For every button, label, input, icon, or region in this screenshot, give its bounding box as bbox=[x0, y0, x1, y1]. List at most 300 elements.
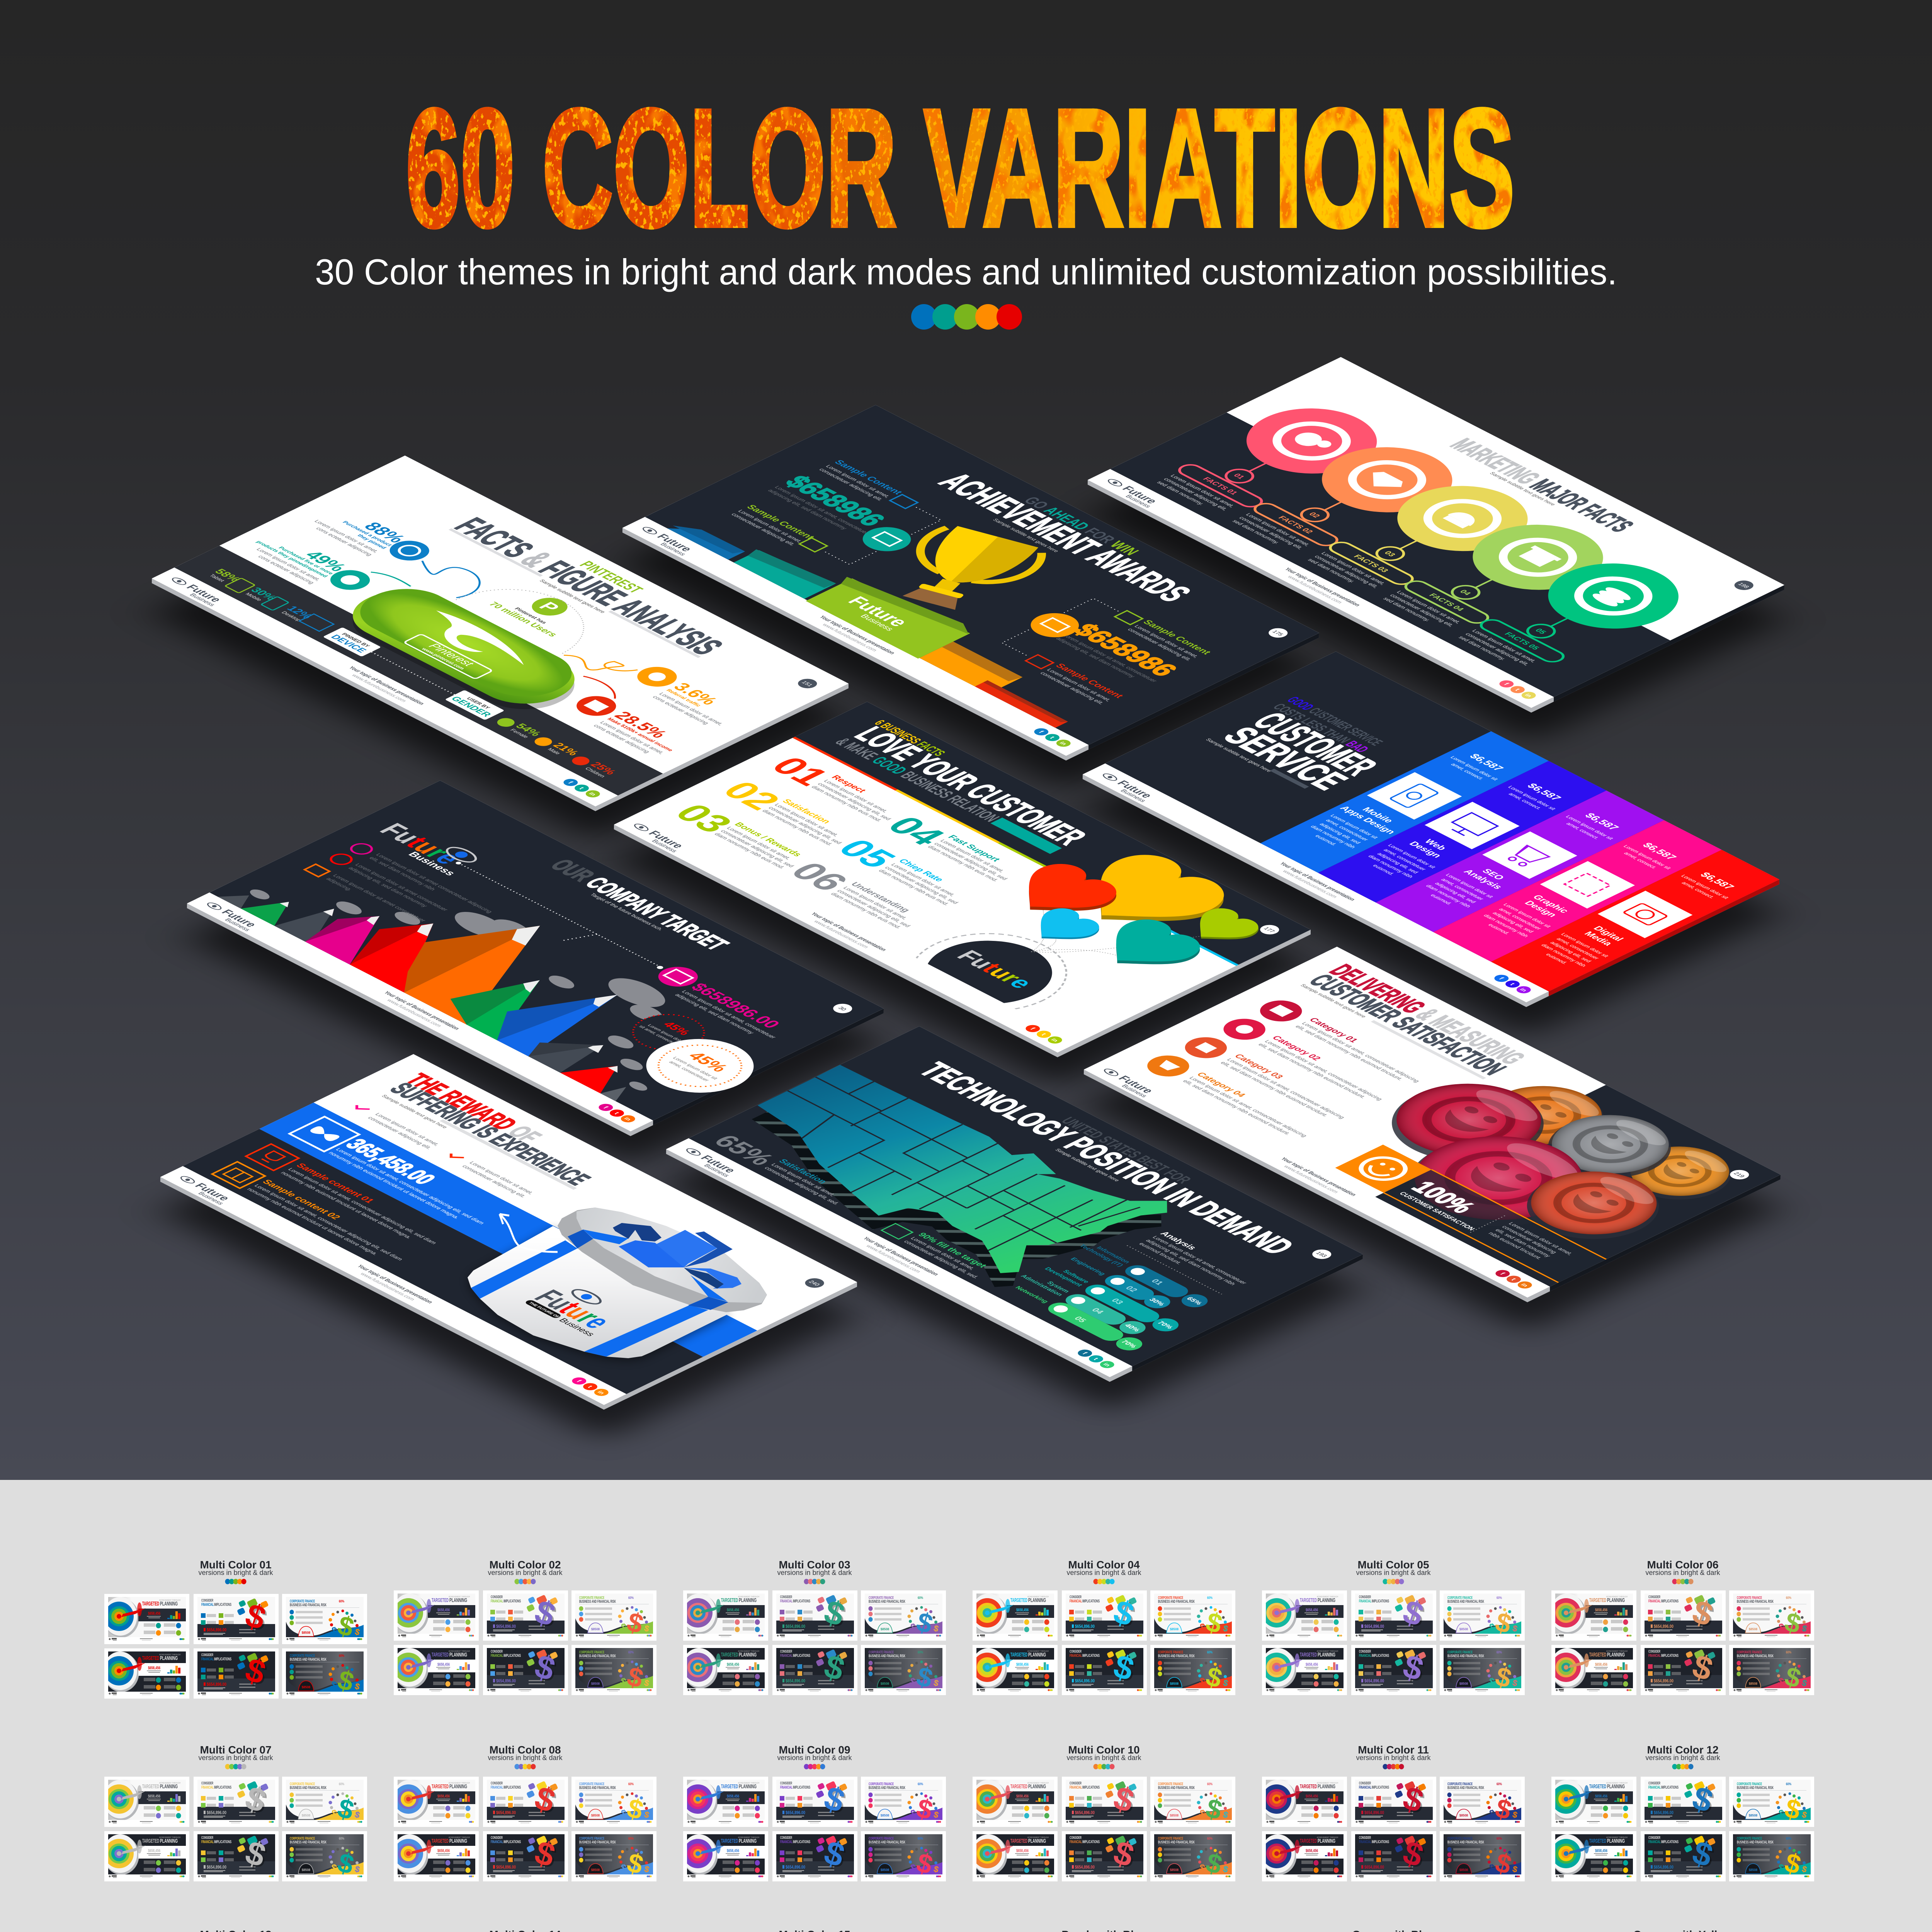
heading bbox=[1204, 695, 1408, 796]
heading: Sample subtitle text goes here bbox=[380, 1094, 449, 1129]
stats left: cons ectetuer adipiscing bbox=[314, 527, 373, 557]
service labels: Design bbox=[1522, 900, 1559, 918]
service icons bbox=[1367, 772, 1692, 938]
satisfaction text bbox=[1470, 1216, 1576, 1269]
page number bbox=[1731, 578, 1757, 592]
theme: Multi Color 03: versions in bright & dark bbox=[777, 1569, 852, 1577]
blue band content: nonummy nibh euismod tincidunt ut laoreet dolore magna. bbox=[327, 1151, 461, 1220]
theme: Multi Color 09: Multi Color 09 bbox=[779, 1744, 850, 1756]
checklist: Lorem ipsum dolor sit amet, bbox=[374, 1112, 440, 1147]
categories: elit, sed diam nonummy nibh euismod tincidunt. bbox=[1257, 1043, 1367, 1099]
footer bbox=[163, 575, 604, 801]
overline: PINTEREST bbox=[576, 559, 647, 595]
fact pills: 05 bbox=[1533, 628, 1548, 635]
fact texts: Lorem ipsum dolor sit amet, bbox=[842, 886, 909, 920]
panel: slide Our Company Target bbox=[152, 781, 918, 1166]
bullet icons and text: elit, sed diam nonummy nibh bbox=[367, 856, 437, 891]
stats right: 28.5% bbox=[610, 709, 672, 740]
heading: Sample subtitle text goes here bbox=[1204, 738, 1273, 773]
theme: Multi Color 12: versions in bright & dark bbox=[1645, 1754, 1721, 1762]
theme: Multi Color 06 bbox=[1550, 1559, 1814, 1695]
fact texts: Lorem ipsum dolor sit amet, bbox=[822, 779, 889, 813]
analysis text: Lorem ipsum dolor sit amet, consectetuer bbox=[1151, 1235, 1248, 1285]
theme: Multi Color 07: Multi Color 07 bbox=[200, 1744, 272, 1756]
heading: MARKETING MAJOR FACTS bbox=[1444, 435, 1640, 536]
page number: 175 bbox=[1270, 630, 1284, 637]
service labels: Mobile bbox=[1360, 806, 1396, 824]
device stats: USER BY bbox=[465, 696, 492, 710]
device stats: 30% bbox=[248, 586, 279, 602]
fact texts: Respect bbox=[829, 774, 868, 794]
left stats: Sample Content bbox=[832, 459, 905, 496]
gift box logo: THE FUTURE OF bbox=[527, 1301, 561, 1318]
fact texts: Chiep Rate bbox=[896, 858, 946, 883]
mountains bbox=[218, 830, 752, 1101]
right stats: Sample Content bbox=[1053, 662, 1126, 699]
stats left: cons ectetuer adipiscing bbox=[256, 554, 315, 585]
device stats: 54% bbox=[513, 722, 544, 738]
service labels: Lorem ipsum dolor sit bbox=[1502, 903, 1552, 928]
skill pills: 04 bbox=[1090, 1307, 1106, 1315]
theme: Multi Color 08: versions in bright & dark bbox=[488, 1754, 563, 1762]
big logo: Future bbox=[372, 820, 469, 868]
checklist: consectetuer adipiscing elit. bbox=[461, 1164, 527, 1199]
satisfaction stat bbox=[1398, 1178, 1503, 1231]
satisfaction text: Lorem ipsum dolor sit amet, bbox=[1507, 1222, 1574, 1256]
bullet icons and text: Lorem ipsum dolor sit amet consectetuer bbox=[331, 874, 427, 923]
skill pills: 65% bbox=[1185, 1296, 1204, 1306]
service labels: euismod. bbox=[1371, 864, 1396, 876]
heading bbox=[908, 1054, 1312, 1260]
right stats: Lorem ipsum dolor sit amet, consectetuer bbox=[1061, 633, 1158, 683]
satisfaction stat: CUSTOMER SATISFACTION bbox=[1398, 1191, 1477, 1231]
left stats: consectetuer adipiscing elit. bbox=[817, 468, 884, 502]
target stat bbox=[880, 1220, 997, 1279]
heading: Sample subtitle text goes here bbox=[1299, 983, 1368, 1019]
trophy bbox=[874, 522, 1052, 617]
dark band content: nonummy nibh euismod tincidunt ut laoreet dolore magna. bbox=[245, 1187, 379, 1256]
theme: Multi Color 09: versions in bright & dark bbox=[777, 1754, 852, 1762]
categories: elit, sed diam nonummy nibh euismod tincidunt. bbox=[1219, 1061, 1330, 1117]
satisfaction stat: Satisfaction bbox=[777, 1158, 829, 1185]
arrow bbox=[500, 1214, 558, 1252]
orange smile tile bbox=[1335, 1145, 1432, 1193]
categories: Lorem ipsum dolor sit amet, consectetuer adipiscing bbox=[1263, 1039, 1384, 1101]
footer bbox=[1095, 1066, 1536, 1292]
page number bbox=[1265, 626, 1291, 639]
categories: elit, sed diam nonummy nibh euismod tincidunt. bbox=[1294, 1025, 1404, 1081]
colour stripe bbox=[793, 736, 1239, 966]
panel: slide Love Your Customer bbox=[579, 702, 1345, 1087]
service labels: Web bbox=[1422, 838, 1449, 852]
fact pills: 02 bbox=[1307, 511, 1322, 519]
satisfaction stat: 100% bbox=[1405, 1178, 1481, 1216]
numbered facts: 06 bbox=[781, 857, 858, 896]
fact texts: diam nonummy nibh euis mod. bbox=[829, 892, 903, 930]
skill labels: Administration bbox=[1019, 1274, 1065, 1297]
service labels: amet, consectetuer bbox=[1382, 848, 1427, 871]
gift box lid bbox=[558, 1208, 767, 1312]
service labels: euismod. bbox=[1429, 893, 1454, 906]
service labels: adipiscing elit, sed bbox=[1376, 852, 1420, 874]
service labels: amet, consectetuer bbox=[1555, 937, 1600, 960]
page number bbox=[794, 677, 821, 690]
colour dots bbox=[911, 304, 1022, 330]
device stats: Mobile bbox=[244, 592, 264, 602]
numbered facts: 02 bbox=[713, 776, 790, 815]
fact pills: FACTS 02 bbox=[1276, 515, 1315, 535]
gift bow bbox=[613, 1223, 742, 1289]
theme: Multi Color 11: Multi Color 11 bbox=[1358, 1744, 1429, 1756]
theme: Multi Color 12: Multi Color 12 bbox=[1647, 1744, 1719, 1756]
footer bbox=[172, 1174, 612, 1400]
dark percent circle: sit amet, consectetuer bbox=[638, 1025, 683, 1048]
service prices: Lorem ipsum dolor sit bbox=[1622, 844, 1672, 870]
panel: slide Delivering Customer Satisfaction bbox=[1049, 947, 1815, 1332]
gift box logo: Future bbox=[527, 1286, 619, 1333]
theme: Multi Color 03 bbox=[682, 1559, 946, 1695]
subtitle: Target of the future business inch. bbox=[589, 893, 665, 931]
device stats: 25% bbox=[587, 760, 619, 776]
device stats bbox=[205, 566, 620, 780]
fact descriptions: sed diam nonummy. bbox=[1381, 597, 1432, 622]
service labels: SEO bbox=[1480, 867, 1507, 881]
service labels: adipiscing elit, sed bbox=[1491, 911, 1535, 934]
fact descriptions: consectetuer adipiscing elit, bbox=[1237, 516, 1304, 550]
footer bbox=[1094, 771, 1534, 997]
left stats: Lorem ipsum dolor sit amet, consectetuer bbox=[773, 485, 870, 535]
stats right: cons ectetuer adipiscing bbox=[592, 724, 651, 754]
podium blocks bbox=[666, 500, 1112, 728]
left stats: consectetuer adipiscing elit. bbox=[730, 512, 796, 547]
numbered facts bbox=[665, 752, 955, 897]
satisfaction stat bbox=[707, 1131, 858, 1208]
service labels: Lorem ipsum dolor sit bbox=[1387, 844, 1437, 869]
theme: Multi Color 02: Multi Color 02 bbox=[489, 1559, 561, 1571]
stats right: Lorem ipsum dolor sit amet, bbox=[657, 692, 724, 726]
skill labels: Information bbox=[1095, 1246, 1132, 1264]
subtitle: Sample subtitle text goes here bbox=[992, 518, 1060, 553]
service prices: amet, consect. bbox=[1680, 881, 1716, 899]
panel: slide The Reward Of Suffering bbox=[126, 1054, 892, 1440]
gift box logo: Business bbox=[557, 1317, 597, 1337]
heading: THE REWARD OF bbox=[400, 1070, 548, 1146]
fact texts: Lorem ipsum dolor sit amet, bbox=[773, 803, 840, 837]
heading bbox=[1299, 961, 1533, 1080]
analysis text: euismod tincidunt. bbox=[1137, 1242, 1183, 1265]
fact descriptions: sed diam nonummy. bbox=[1306, 558, 1356, 583]
service labels: Lorem ipsum dolor sit bbox=[1560, 932, 1610, 958]
stats right: Lorem ipsum dolor sit amet, bbox=[598, 721, 665, 755]
fact texts: consectetuer adipiscing elit, sed bbox=[719, 829, 795, 868]
heading: LOVE YOUR CUSTOMER bbox=[846, 723, 1095, 849]
stats left: 88% bbox=[360, 520, 410, 545]
dark hero background bbox=[0, 0, 1932, 1480]
subtitle: Sample subtitle text goes here bbox=[1488, 471, 1557, 507]
fact texts: consectetuer adipiscing elit, sed bbox=[835, 889, 912, 928]
target stat: consectetuer adipiscing elit, sed. bbox=[902, 1240, 980, 1279]
skill pills: 40% bbox=[1123, 1323, 1142, 1332]
3D pinterest puck: Pinterest bbox=[426, 642, 477, 668]
stats right bbox=[507, 636, 752, 759]
panel: slide Marketing Major Facts bbox=[1053, 357, 1819, 743]
dark percent circle: 45% bbox=[660, 1020, 693, 1037]
left stats: Lorem ipsum dolor sit amet, bbox=[736, 509, 803, 544]
fact texts: consectetuer adipiscing elit, sed bbox=[932, 842, 1009, 881]
theme: Multi Color 06: Multi Color 06 bbox=[1647, 1559, 1719, 1571]
right stats: Lorem ipsum dolor sit amet, bbox=[1133, 624, 1200, 659]
left stats: $658986 bbox=[778, 472, 891, 530]
skill pills: 30% bbox=[1148, 1297, 1167, 1307]
clouds bbox=[247, 837, 752, 1094]
device stats: 58% bbox=[212, 568, 243, 583]
page number bbox=[801, 1276, 828, 1290]
fact texts bbox=[713, 774, 1025, 931]
logo on podium: Business bbox=[858, 613, 896, 632]
dark band content: Sample content 02 bbox=[260, 1179, 343, 1221]
right stats: consectetuer adipiscing elit. bbox=[1039, 671, 1105, 705]
page number: 193 bbox=[1314, 1251, 1328, 1258]
skill pills: 70% bbox=[1156, 1320, 1175, 1330]
heading: FACTS & FIGURE ANALYSIS bbox=[446, 513, 732, 659]
theme: Multi Color 10 bbox=[971, 1744, 1235, 1881]
3D pinterest puck: www.pinterest.com bbox=[420, 647, 466, 670]
service prices: amet, consect. bbox=[1565, 821, 1601, 840]
categories: Lorem ipsum dolor sit amet, consectetuer adipiscing bbox=[1300, 1021, 1421, 1083]
hearts bbox=[952, 832, 1286, 999]
dark band content: nonummy nibh euismod tincidunt ut laoreet dolore magna. bbox=[279, 1171, 413, 1240]
skill pills: 70% bbox=[1119, 1339, 1139, 1349]
target stat: Lorem ipsum dolor sit amet, bbox=[909, 1236, 976, 1271]
checklist: Lorem ipsum dolor sit amet, bbox=[468, 1161, 535, 1195]
left stats: Lorem ipsum dolor sit amet, bbox=[824, 464, 891, 499]
fact texts: consectetuer adipiscing elit, sed bbox=[816, 782, 892, 821]
3D pinterest puck bbox=[327, 579, 604, 719]
footer bbox=[199, 900, 639, 1126]
theme: Multi Color 08 bbox=[393, 1744, 656, 1881]
right stats: consectetuer adipiscing elit. bbox=[1126, 628, 1193, 662]
page number: 198 bbox=[1736, 582, 1750, 589]
amount callout bbox=[636, 959, 800, 1043]
categories: Category 03 bbox=[1232, 1053, 1286, 1080]
bullet icons and text: adipiscing. bbox=[325, 877, 354, 892]
device stats: Children bbox=[584, 767, 607, 778]
categories: Lorem ipsum dolor sit amet, consectetuer adipiscing bbox=[1188, 1076, 1308, 1138]
heading bbox=[376, 1070, 617, 1193]
service labels: diam nonummy nibh bbox=[1425, 884, 1472, 908]
fact descriptions: sed diam nonummy. bbox=[1155, 480, 1205, 506]
stats right: 3.6% bbox=[669, 680, 722, 707]
theme: Multi Color 11 bbox=[1261, 1744, 1525, 1881]
categories bbox=[1138, 996, 1434, 1144]
stats left: products they pinned/repinned bbox=[255, 540, 329, 578]
categories: Category 04 bbox=[1195, 1071, 1248, 1098]
service labels: diam nonummy nibh bbox=[1367, 854, 1415, 879]
page number: 240 bbox=[807, 1280, 821, 1287]
fact pills: FACTS 04 bbox=[1427, 592, 1466, 612]
dark band content: Sample content 01 bbox=[294, 1162, 376, 1204]
device stats: DEVICE bbox=[328, 633, 369, 654]
left stats: Sample Content bbox=[744, 503, 817, 541]
categories: elit, sed diam nonummy nibh euismod tincidunt. bbox=[1181, 1079, 1292, 1136]
footer bbox=[634, 525, 1074, 750]
page number: 219 bbox=[1732, 1172, 1746, 1179]
service labels: euismod. bbox=[1544, 952, 1569, 965]
heading: Simple subtitle text goes here bbox=[1054, 1148, 1121, 1182]
theme: Multi Color 03: Multi Color 03 bbox=[779, 1559, 850, 1571]
heading: CUSTOMER bbox=[1243, 707, 1387, 780]
fact texts: diam nonummy nibh euis mod. bbox=[877, 869, 951, 906]
fact pills: FACTS 05 bbox=[1502, 631, 1541, 651]
fact texts: diam nonummy nibh euis mod. bbox=[926, 845, 1000, 883]
dark band content: Lorem ipsum dolor sit amet, consectetuer adipiscing elit, sed diam bbox=[253, 1184, 404, 1261]
service labels: amet, consectetuer bbox=[1440, 878, 1485, 901]
overline: GO AHEAD FOR WIN bbox=[1020, 495, 1143, 557]
dark percent circle bbox=[618, 1007, 719, 1058]
right stats: Sample Content bbox=[1140, 619, 1213, 656]
heading: DELIVERING & MEASURING bbox=[1323, 961, 1532, 1068]
service prices: $6,587 bbox=[1640, 841, 1679, 861]
stats left bbox=[241, 501, 497, 629]
amount callout: $658986.00 bbox=[686, 981, 784, 1031]
satisfaction text: nibh euismod tincidunt. bbox=[1487, 1231, 1543, 1260]
theme: Multi Color 11: versions in bright & dark bbox=[1356, 1754, 1431, 1762]
fact pills: FACTS 01 bbox=[1201, 476, 1240, 496]
fact descriptions: sed diam nonummy. bbox=[1457, 636, 1507, 661]
fact texts: consectetuer adipiscing elit, sed bbox=[883, 866, 959, 905]
service prices: Lorem ipsum dolor sit bbox=[1507, 785, 1557, 811]
heading: ACHIEVEMENT AWARDS bbox=[930, 469, 1200, 606]
stats left: Lorem ipsum dolor sit amet, bbox=[313, 519, 380, 554]
fact texts: diam nonummy nibh euis mod. bbox=[713, 832, 786, 870]
theme: Multi Color 01: Multi Color 01 bbox=[200, 1559, 272, 1571]
fact descriptions: Lorem ipsum dolor sit amet, bbox=[1320, 551, 1387, 586]
service prices: $6,587 bbox=[1582, 811, 1622, 832]
skill labels: Engineering bbox=[1069, 1257, 1107, 1276]
gift box bbox=[468, 1208, 767, 1361]
service prices: $6,587 bbox=[1524, 782, 1564, 802]
light swatch background bbox=[0, 1480, 1932, 1932]
theme: Multi Color 04: Multi Color 04 bbox=[1068, 1559, 1140, 1571]
heading: GOOD CUSTOMER SERVICE bbox=[1284, 695, 1387, 747]
page number: 151 bbox=[800, 680, 814, 687]
footer bbox=[1099, 477, 1539, 702]
service labels: adipiscing elit, sed bbox=[1434, 881, 1477, 904]
skill labels: Software bbox=[1061, 1269, 1091, 1284]
fact descriptions bbox=[1155, 474, 1537, 670]
service labels bbox=[1298, 800, 1636, 972]
checklist: consectetuer adipiscing elit. bbox=[366, 1116, 433, 1150]
panel: slide Achievement Awards bbox=[588, 405, 1354, 791]
numbered facts: 03 bbox=[665, 799, 742, 838]
heading: CUSTOMER SATISFACTION bbox=[1302, 971, 1513, 1078]
dotted connector bbox=[433, 863, 661, 980]
skill labels: Development bbox=[1043, 1266, 1084, 1287]
skill pills: 02 bbox=[1123, 1285, 1139, 1293]
stats right: Referral traffic bbox=[665, 688, 702, 707]
fact descriptions: Lorem ipsum dolor sit amet, bbox=[1395, 590, 1462, 624]
right stats: Lorem ipsum dolor sit amet, bbox=[1045, 668, 1112, 702]
theme: Multi Color 09 bbox=[682, 1744, 946, 1881]
translucent stat band bbox=[1384, 1170, 1606, 1282]
heading: 6 BUSINESS FACTS bbox=[871, 718, 949, 758]
stats left: 49% bbox=[301, 548, 351, 574]
white percent circle: Lorem ipsum dolor sit bbox=[672, 1056, 719, 1080]
orange lines bbox=[1384, 1170, 1606, 1282]
theme: Multi Color 05: versions in bright & dark bbox=[1356, 1569, 1431, 1577]
categories: Lorem ipsum dolor sit amet, consectetuer adipiscing bbox=[1225, 1058, 1346, 1119]
fact texts: Fast Support bbox=[946, 834, 1002, 863]
skill pills: 03 bbox=[1109, 1298, 1125, 1305]
page number: 30 bbox=[837, 1006, 848, 1012]
numbered facts: 05 bbox=[828, 834, 905, 873]
left stats bbox=[724, 457, 961, 575]
theme: Multi Color 10: Multi Color 10 bbox=[1068, 1744, 1140, 1756]
service labels: diam nonummy nibh bbox=[1309, 825, 1357, 849]
theme: Multi Color 05: Multi Color 05 bbox=[1357, 1559, 1429, 1571]
dark band content bbox=[211, 1144, 451, 1265]
service labels: amet, consectetuer bbox=[1497, 907, 1543, 930]
fact descriptions: Lorem ipsum dolor sit amet, bbox=[1169, 474, 1236, 508]
fact texts: diam nonummy nibh euis mod. bbox=[760, 809, 834, 847]
service prices: Lorem ipsum dolor sit bbox=[1680, 874, 1730, 900]
fact texts: Satisfaction bbox=[780, 798, 833, 825]
theme: Multi Color 04 bbox=[971, 1559, 1235, 1695]
fact descriptions: consectetuer adipiscing elit, bbox=[1313, 554, 1380, 589]
logo on podium: Future bbox=[843, 594, 913, 629]
service labels: diam nonummy nibh bbox=[1482, 913, 1530, 938]
gift box body bbox=[468, 1226, 730, 1361]
fact pills: 03 bbox=[1382, 550, 1397, 558]
skill pills: 05 bbox=[1072, 1315, 1088, 1323]
heading: & MAKE GOOD BUSINESS RELATION bbox=[831, 736, 1004, 824]
page number bbox=[1726, 1168, 1753, 1181]
pinterest core text: P bbox=[534, 600, 564, 614]
facts circles bbox=[1203, 395, 1706, 650]
footer bbox=[678, 1146, 1118, 1372]
stats left: Purchased five or more bbox=[277, 546, 335, 575]
device stats: Tablet bbox=[208, 573, 226, 583]
page number bbox=[1256, 923, 1283, 936]
pinterest core text: Pinterest has bbox=[514, 607, 548, 624]
theme: Multi Color 01 bbox=[103, 1559, 367, 1699]
satisfaction stat: Lorem ipsum dolor sit amet, bbox=[770, 1163, 837, 1197]
fact texts: diam nonummy nibh euis mod. bbox=[810, 785, 883, 823]
bullet icons and text bbox=[304, 842, 495, 938]
analysis text: adipiscing elit, sed diam nonummy nibh bbox=[1144, 1238, 1237, 1286]
satisfaction text: consectetuer adipiscing bbox=[1500, 1225, 1558, 1254]
device stats: Desktop bbox=[280, 611, 303, 622]
left stats: adipiscing elit, sed diam nonummy bbox=[766, 488, 848, 531]
footer bbox=[626, 821, 1066, 1047]
device stats: 21% bbox=[550, 742, 581, 757]
numbered facts: 01 bbox=[762, 752, 839, 791]
satisfaction text: elit, sed diam nonummy bbox=[1493, 1228, 1552, 1258]
page number bbox=[1308, 1248, 1335, 1261]
service labels: diam nonummy nibh bbox=[1540, 943, 1587, 968]
fact pills: 04 bbox=[1458, 589, 1473, 596]
checklist bbox=[348, 1103, 535, 1199]
theme: Multi Color 02 bbox=[393, 1559, 656, 1695]
theme: Multi Color 06: versions in bright & dark bbox=[1645, 1569, 1721, 1577]
satisfaction stat: 65% bbox=[707, 1131, 781, 1169]
subtitle: 30 Color themes in bright and dark modes and unlimited customization possibilities. bbox=[315, 252, 1617, 292]
device stats: 12% bbox=[284, 605, 315, 620]
service prices: $6,587 bbox=[1697, 871, 1737, 891]
service prices: Lorem ipsum dolor sit bbox=[1449, 755, 1499, 781]
fact pills: FACTS 03 bbox=[1352, 554, 1390, 573]
service prices: amet, consect. bbox=[1507, 792, 1543, 810]
